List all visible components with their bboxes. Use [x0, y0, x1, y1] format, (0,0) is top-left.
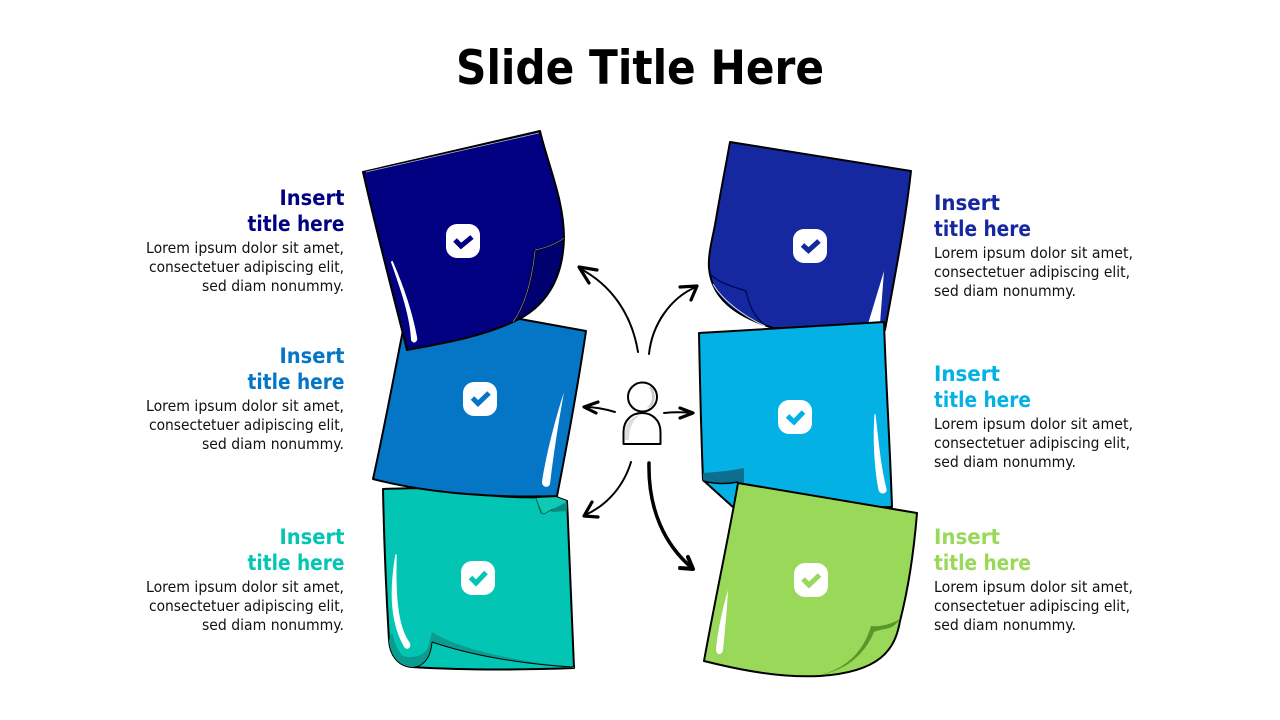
text block: green: consectetuer adipiscing elit, — [934, 597, 1130, 615]
text block: blue: sed diam nonummy. — [202, 435, 344, 453]
note: green sheet — [704, 483, 917, 676]
arrow: to teal sheet — [584, 462, 631, 517]
text block: dark blue: Lorem ipsum dolor sit amet, — [934, 244, 1133, 262]
text block: cyan: sed diam nonummy. — [934, 453, 1076, 471]
note: cyan sheet — [699, 322, 892, 510]
text block: green — [934, 525, 1133, 634]
text block: navy — [146, 186, 344, 295]
text block: navy: consectetuer adipiscing elit, — [149, 258, 344, 276]
note: blue sheet — [373, 319, 586, 496]
text block: dark blue: consectetuer adipiscing elit, — [934, 263, 1130, 281]
note: teal sheet — [383, 488, 574, 669]
text block: teal: title here — [248, 551, 344, 575]
text block: green: Insert — [934, 525, 1000, 549]
text block: green: title here — [934, 551, 1031, 575]
icon: cyan check — [778, 400, 812, 434]
text block: dark blue: title here — [934, 217, 1031, 241]
arrow: to green sheet — [649, 463, 693, 569]
text block: teal: sed diam nonummy. — [202, 616, 344, 634]
text block: green: sed diam nonummy. — [934, 616, 1076, 634]
highlight: navy sheet — [392, 262, 416, 341]
highlight: green sheet — [716, 590, 728, 654]
text block: navy: Insert — [280, 186, 344, 210]
text block: navy: title here — [248, 212, 344, 236]
text block: teal: Insert — [280, 525, 344, 549]
text block: blue — [146, 344, 344, 453]
text block: dark blue: Insert — [934, 191, 1000, 215]
text block: green: Lorem ipsum dolor sit amet, — [934, 578, 1133, 596]
text block: navy: sed diam nonummy. — [202, 277, 344, 295]
highlight: dark blue sheet — [868, 271, 884, 324]
text block: teal: consectetuer adipiscing elit, — [149, 597, 344, 615]
text block: blue: title here — [248, 370, 344, 394]
note: navy sheet — [363, 131, 564, 350]
note: dark blue sheet — [709, 142, 911, 330]
arrow: to cyan sheet — [664, 408, 693, 418]
text block: blue: Insert — [280, 344, 344, 368]
text block: cyan: consectetuer adipiscing elit, — [934, 434, 1130, 452]
arrow: to navy sheet — [579, 267, 638, 352]
text block: blue: Lorem ipsum dolor sit amet, — [146, 397, 344, 415]
icon: navy check — [446, 224, 480, 258]
text block: blue: consectetuer adipiscing elit, — [149, 416, 344, 434]
title: Slide Title Here — [456, 41, 824, 96]
icon: dark blue check — [793, 229, 827, 263]
arrow: to dark blue sheet — [649, 286, 697, 354]
highlight: cyan sheet — [874, 414, 886, 493]
text block: cyan — [934, 362, 1133, 471]
text block: teal: Lorem ipsum dolor sit amet, — [146, 578, 344, 596]
text block: dark blue — [934, 191, 1133, 300]
text block: teal — [146, 525, 344, 634]
text block: dark blue: sed diam nonummy. — [934, 282, 1076, 300]
text block: cyan: title here — [934, 388, 1031, 412]
text block: cyan: Insert — [934, 362, 1000, 386]
highlight: blue sheet — [542, 392, 564, 487]
arrow: to blue sheet — [584, 402, 615, 413]
icon: blue check — [463, 382, 497, 416]
highlight: teal sheet — [392, 555, 410, 648]
icon: teal check — [461, 561, 495, 595]
arrows — [579, 267, 697, 569]
icon: green check — [794, 563, 828, 597]
text block: navy: Lorem ipsum dolor sit amet, — [146, 239, 344, 257]
text block: cyan: Lorem ipsum dolor sit amet, — [934, 415, 1133, 433]
icon: person — [624, 382, 660, 444]
